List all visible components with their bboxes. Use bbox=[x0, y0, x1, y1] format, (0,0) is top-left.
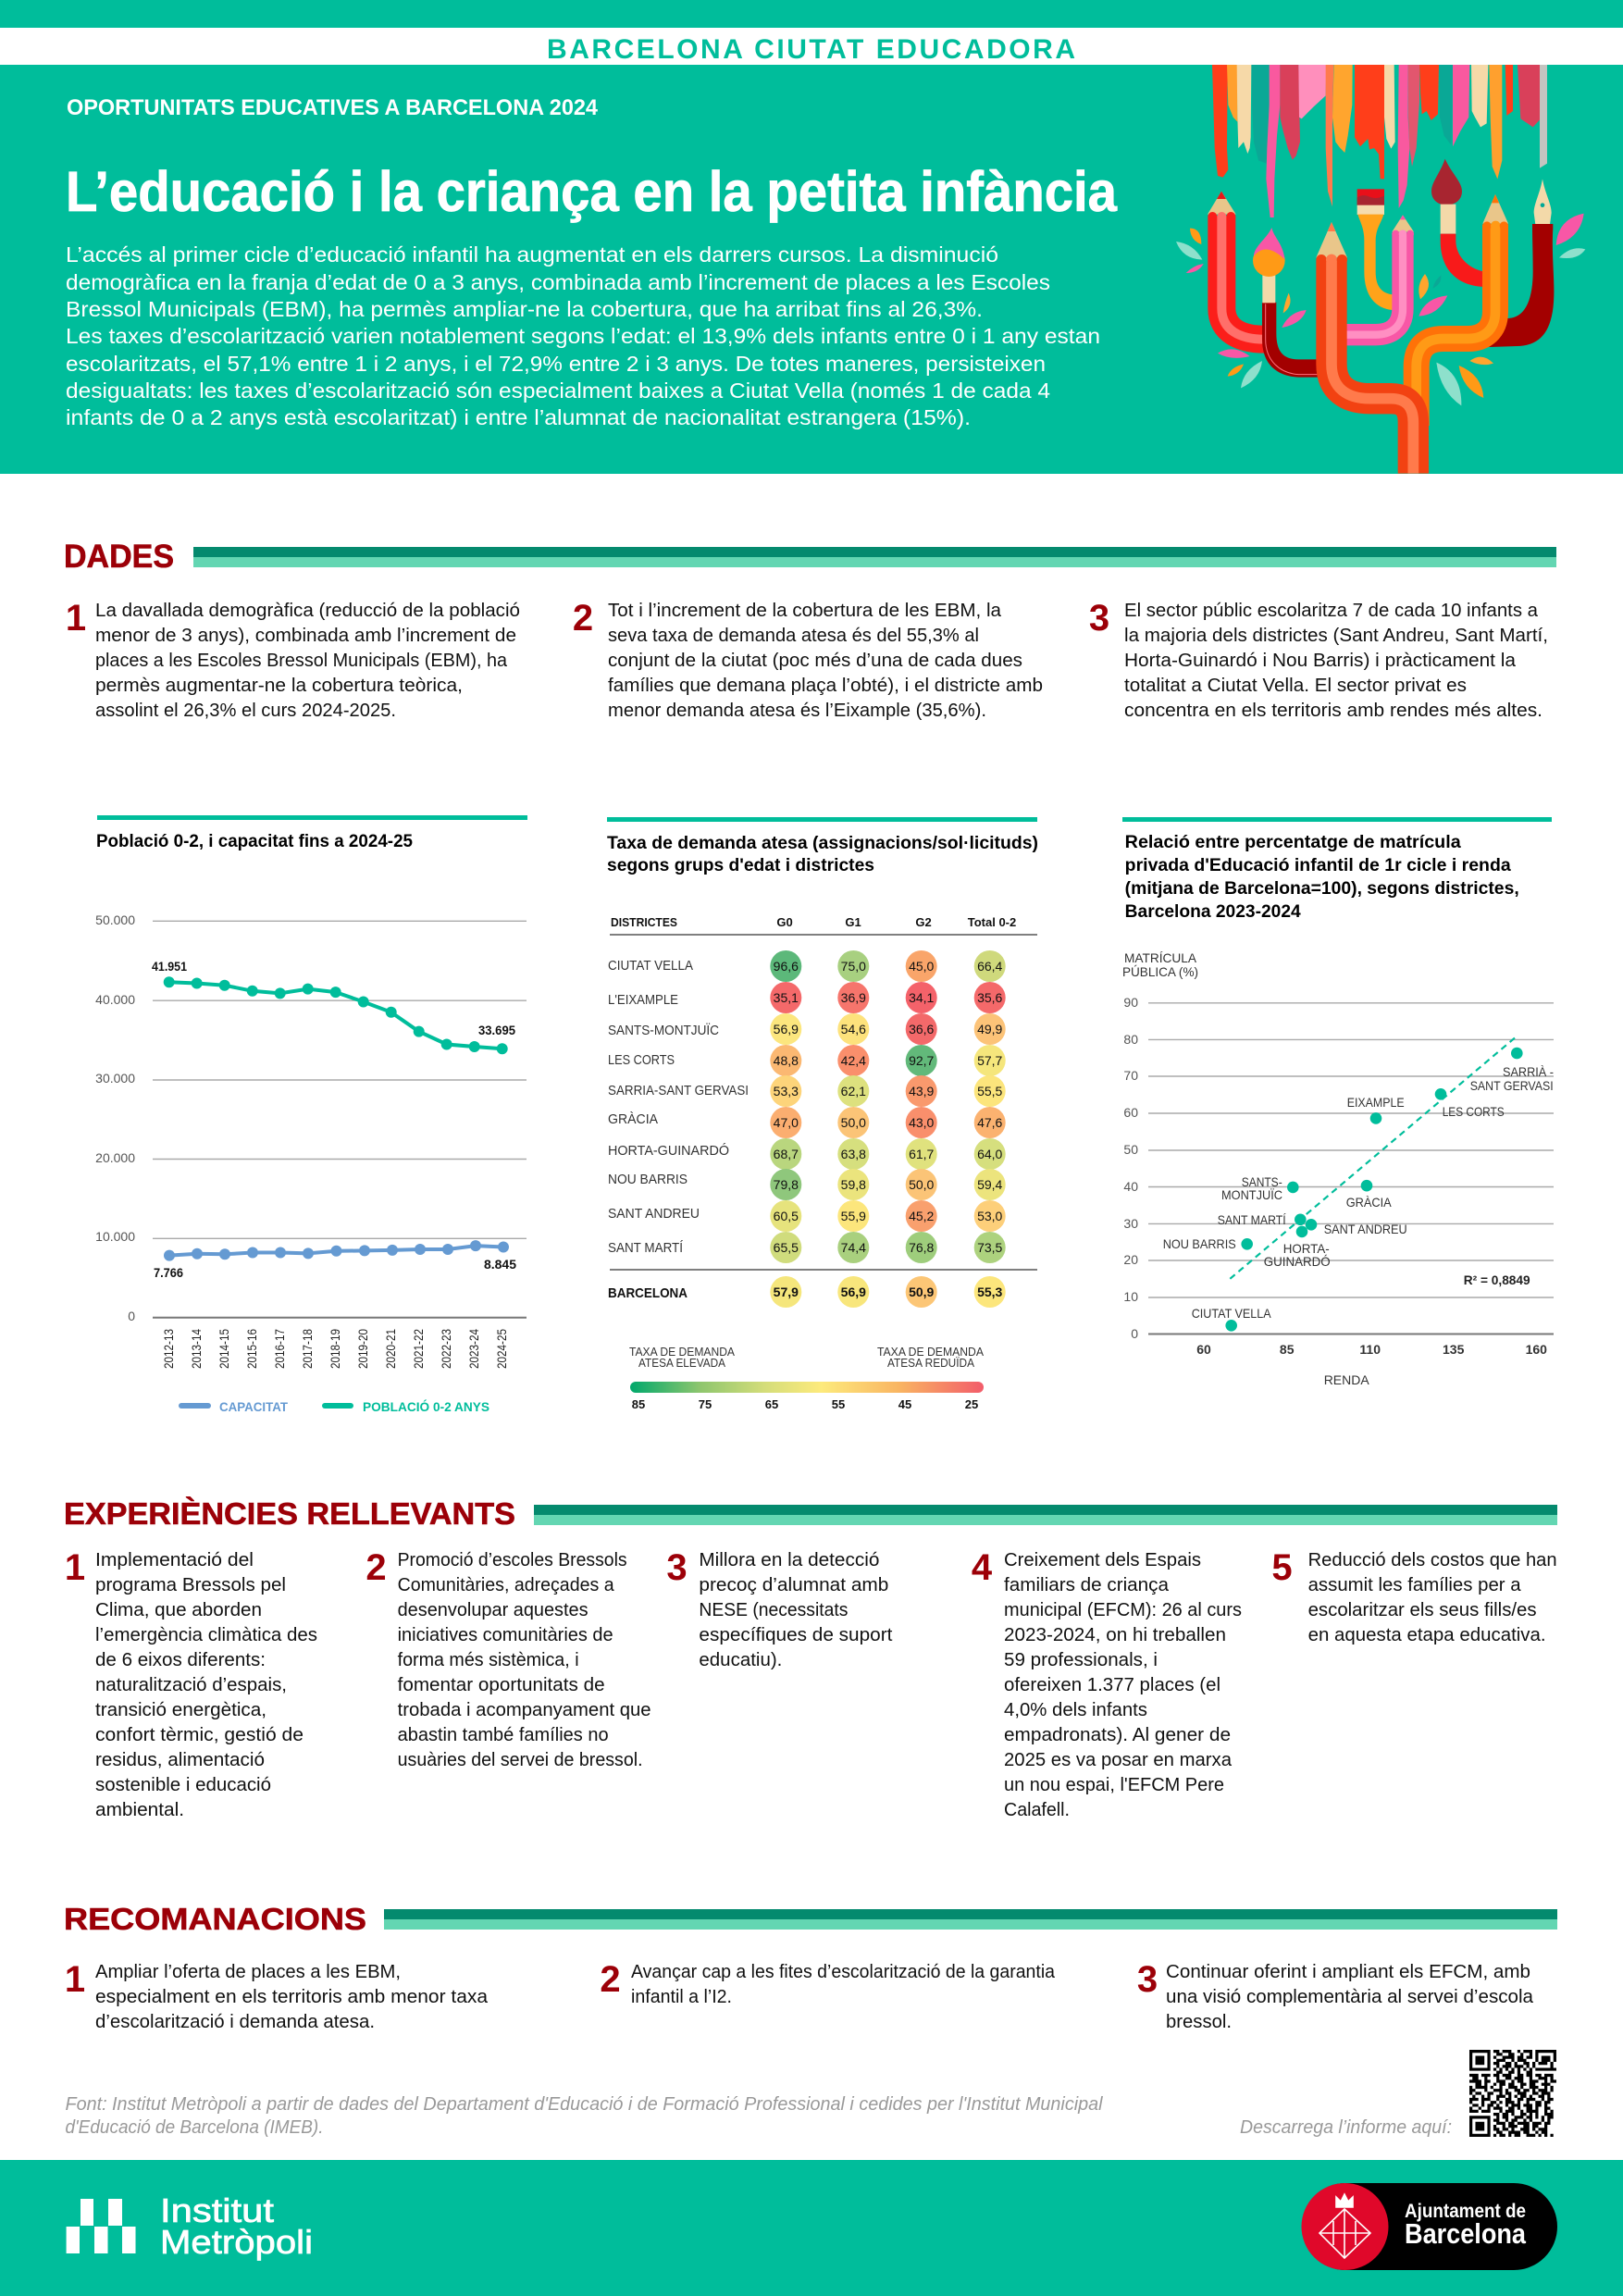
experience 1: programa Bressols pel bbox=[95, 1575, 286, 1595]
scatter labels: SANT MARTÍ bbox=[1218, 1212, 1286, 1227]
recommendation 3: una visió complementària al servei d’escola bbox=[1166, 1987, 1534, 2007]
main title: L’educació i la criança en la petita infància bbox=[66, 160, 1118, 223]
line chart: population and capacity: 40.000 bbox=[95, 992, 135, 1007]
intro text: Les taxes d’escolarització varien notablement segons l’edat: el 13,9% dels infants entre 0 i 1 any estan bbox=[66, 324, 1100, 348]
data point 2: menor demanda atesa és l’Eixample (35,6%). bbox=[608, 701, 986, 721]
data point 3: concentra en els territoris amb rendes més altes. bbox=[1124, 701, 1542, 721]
experience 1: 1 bbox=[65, 1547, 85, 1588]
colour scale legend: 65 bbox=[765, 1397, 778, 1411]
experience 5: 5 bbox=[1271, 1547, 1293, 1588]
section heading: RECOMANACIONS: RECOMANACIONS bbox=[64, 1902, 366, 1936]
header panel bbox=[0, 0, 1623, 475]
line chart: population and capacity: 33.695 bbox=[478, 1023, 515, 1037]
line chart: population and capacity: 10.000 bbox=[95, 1229, 135, 1244]
heat table: demand rate by district: G0 bbox=[776, 915, 793, 929]
recommendation 1: d’escolarització i demanda atesa. bbox=[95, 2012, 375, 2032]
table row: Nou Barris bbox=[608, 1169, 1006, 1200]
scatter chart: enrolment vs income: 0 bbox=[1131, 1326, 1138, 1341]
experience 3: 3 bbox=[666, 1547, 688, 1588]
scatter chart: enrolment vs income: privada d'Educació infantil de 1r cicle i renda bbox=[1125, 856, 1511, 875]
table row: Nou Barris: 59,8 bbox=[841, 1177, 866, 1192]
data point 3: 3 bbox=[1089, 598, 1109, 639]
colour scale legend: TAXA DE DEMANDA bbox=[877, 1345, 984, 1359]
footer band bbox=[0, 2160, 1623, 2296]
icon: pink pencil bbox=[1344, 215, 1414, 335]
table row: Sant Andreu: 60,5 bbox=[774, 1209, 799, 1223]
table row: Les Corts: 48,8 bbox=[774, 1053, 799, 1068]
section heading: EXPERIÈNCIES RELLEVANTS bbox=[64, 1496, 1557, 1531]
table row: Barcelona total: 57,9 bbox=[774, 1285, 799, 1299]
intro text: escolaritzats, el 57,1% entre 1 i 2 anys, i el 72,9% entre 2 i 3 anys. De totes maneres, persisteixen bbox=[66, 352, 1046, 376]
colour scale legend bbox=[629, 1345, 984, 1411]
table row: L'Eixample: 36,9 bbox=[841, 990, 866, 1005]
table row: Sants-Montjuïc: 54,6 bbox=[841, 1022, 866, 1036]
line chart: population and capacity: 0 bbox=[128, 1309, 135, 1323]
recommendation 2: Avançar cap a les fites d’escolarització de la garantia bbox=[631, 1962, 1056, 1982]
logo: Ajuntament de Barcelona bbox=[1301, 2183, 1557, 2270]
table row: L'Eixample: L'EIXAMPLE bbox=[608, 992, 678, 1008]
recommendation 2 bbox=[600, 1959, 1056, 2007]
table row: L'Eixample: 35,6 bbox=[977, 990, 1003, 1005]
recommendation 1: 1 bbox=[65, 1959, 85, 2000]
line chart: population and capacity: 2021-22 bbox=[411, 1329, 426, 1369]
icon: flat brush bbox=[1357, 189, 1393, 310]
header kicker: OPORTUNITATS EDUCATIVES A BARCELONA 2024 bbox=[67, 95, 599, 120]
table row: Ciutat Vella: 96,6 bbox=[774, 959, 799, 974]
data point 2: conjunt de la ciutat (poc més d’una de cada dues bbox=[608, 651, 1022, 671]
experience 5: escolaritzar els seus fills/es bbox=[1308, 1600, 1537, 1620]
table row: Sants-Montjuïc: 56,9 bbox=[774, 1022, 799, 1036]
data point 1: places a les Escoles Bressol Municipals (EBM), ha bbox=[95, 651, 508, 671]
scatter chart: enrolment vs income: MATRÍCULA bbox=[1124, 950, 1197, 965]
experience 3: educatiu). bbox=[699, 1650, 782, 1670]
table row: Gràcia bbox=[608, 1107, 1006, 1138]
table row: Horta-Guinardó: 61,7 bbox=[909, 1147, 935, 1161]
table row: Les Corts: 42,4 bbox=[841, 1053, 866, 1068]
line chart: population and capacity: 2024-25 bbox=[494, 1329, 509, 1369]
intro text: Bressol Municipals (EBM), ha permès ampliar-ne la cobertura, que ha arribat fins al 26,3%. bbox=[66, 297, 983, 321]
scatter chart: enrolment vs income: 85 bbox=[1280, 1342, 1295, 1357]
icon: central pencil bbox=[1316, 222, 1413, 475]
table row: Gràcia: 47,0 bbox=[774, 1115, 799, 1130]
table row: Sarria-Sant Gervasi: 62,1 bbox=[841, 1084, 866, 1098]
recommendation 2: infantil a l’I2. bbox=[631, 1987, 732, 2007]
scatter chart: enrolment vs income: 10 bbox=[1123, 1289, 1138, 1304]
line chart: population and capacity: 2019-20 bbox=[355, 1329, 370, 1369]
data point 3: totalitat a Ciutat Vella. El sector privat es bbox=[1124, 676, 1467, 696]
top banner title: BARCELONA CIUTAT EDUCADORA bbox=[547, 34, 1075, 65]
table row: Sants-Montjuïc: SANTS-MONTJUÏC bbox=[608, 1023, 719, 1038]
icon: paint strokes bbox=[1212, 65, 1547, 217]
chart legend bbox=[179, 1398, 489, 1414]
table row: Ciutat Vella: CIUTAT VELLA bbox=[608, 958, 693, 974]
scatter chart: enrolment vs income: 60 bbox=[1123, 1105, 1138, 1120]
table row: Les Corts: 92,7 bbox=[909, 1053, 935, 1068]
experience 2: fomentar oportunitats de bbox=[398, 1675, 605, 1695]
source note: d'Educació de Barcelona (IMEB). bbox=[65, 2117, 324, 2138]
line chart: population and capacity: Població 0-2, i capacitat fins a 2024-25 bbox=[96, 832, 413, 851]
table row: Sant Andreu bbox=[608, 1200, 1006, 1232]
scatter chart: enrolment vs income: Relació entre percentatge de matrícula bbox=[1125, 833, 1461, 852]
scatter chart: enrolment vs income: 20 bbox=[1123, 1252, 1138, 1267]
experience 1 bbox=[65, 1547, 317, 1820]
data point 3: la majoria dels districtes (Sant Andreu, Sant Martí, bbox=[1124, 626, 1548, 646]
table row: Sant Andreu: 45,2 bbox=[909, 1209, 935, 1223]
table row: Ciutat Vella: 66,4 bbox=[977, 959, 1003, 974]
experience 4: un nou espai, l'EFCM Pere bbox=[1004, 1775, 1224, 1795]
experience 1: Implementació del bbox=[95, 1550, 254, 1570]
data point 1: menor de 3 anys), combinada amb l’increment de bbox=[95, 626, 516, 646]
line chart: population and capacity: 2022-23 bbox=[439, 1329, 453, 1369]
scatter chart: enrolment vs income: 80 bbox=[1123, 1032, 1138, 1047]
source note: Font: Institut Metròpoli a partir de dades del Departament d'Educació i de Formació Professional i cedides per l'Institut Municipal bbox=[65, 2094, 1103, 2115]
table row: Sant Martí: 73,5 bbox=[977, 1240, 1003, 1255]
experience 2: usuàries del servei de bressol. bbox=[398, 1750, 643, 1770]
capacity series bbox=[164, 1240, 509, 1261]
table row: Sants-Montjuïc: 49,9 bbox=[977, 1022, 1003, 1036]
table row: Barcelona total: BARCELONA bbox=[608, 1285, 688, 1301]
experience 2: Promoció d’escoles Bressols bbox=[398, 1550, 627, 1570]
scatter labels: MONTJUÏC bbox=[1221, 1187, 1282, 1202]
recommendation 1: especialment en els territoris amb menor taxa bbox=[95, 1987, 489, 2007]
experience 5: Reducció dels costos que han bbox=[1308, 1550, 1557, 1570]
scatter labels: GRÀCIA bbox=[1346, 1195, 1392, 1210]
experience 2: desenvolupar aquestes bbox=[398, 1600, 588, 1620]
icon: orange pencil bbox=[1417, 194, 1508, 426]
heat table: demand rate by district: Taxa de demanda atesa (assignacions/sol·licituds) bbox=[607, 834, 1038, 853]
line chart: population and capacity: 2013-14 bbox=[189, 1329, 204, 1369]
experience 1: naturalització d’espais, bbox=[95, 1675, 287, 1695]
experience 4: empadronats). Al gener de bbox=[1004, 1725, 1231, 1745]
recommendation 3: Continuar oferint i ampliant els EFCM, amb bbox=[1166, 1962, 1530, 1982]
scatter chart: enrolment vs income: 40 bbox=[1123, 1179, 1138, 1194]
data point 1: permès augmentar-ne la cobertura teòrica, bbox=[95, 676, 463, 696]
scatter labels: SANT ANDREU bbox=[1324, 1222, 1407, 1236]
scatter chart: enrolment vs income bbox=[1122, 817, 1554, 1387]
experience 4: 4 bbox=[972, 1547, 993, 1588]
experience 3: precoç d’alumnat amb bbox=[699, 1575, 888, 1595]
colour scale legend: ATESA ELEVADA bbox=[638, 1356, 725, 1370]
table row: Barcelona total: 55,3 bbox=[977, 1285, 1003, 1299]
recommendation 1 bbox=[65, 1959, 489, 2032]
colour scale legend: 25 bbox=[965, 1397, 978, 1411]
line chart: population and capacity: 2018-19 bbox=[328, 1329, 342, 1369]
line chart: population and capacity: 2015-16 bbox=[244, 1329, 259, 1369]
scatter chart: enrolment vs income: 160 bbox=[1526, 1342, 1547, 1357]
table row: Barcelona total bbox=[608, 1276, 1006, 1308]
table row: Ciutat Vella bbox=[608, 950, 1006, 982]
scatter labels: EIXAMPLE bbox=[1347, 1095, 1405, 1110]
line chart: population and capacity: 2017-18 bbox=[300, 1329, 315, 1369]
recommendation 2: 2 bbox=[600, 1959, 621, 2000]
scatter chart: enrolment vs income: 50 bbox=[1123, 1142, 1138, 1157]
intro text: infants de 0 a 2 anys està escolaritzat) i entre l’alumnat de nacionalitat estrangera (15%). bbox=[66, 405, 971, 429]
table row: Gràcia: 43,0 bbox=[909, 1115, 935, 1130]
scatter labels: HORTA- bbox=[1283, 1241, 1330, 1256]
table row: Les Corts bbox=[608, 1045, 1006, 1076]
experience 5: assumit les famílies per a bbox=[1308, 1575, 1521, 1595]
experience 1: Clima, que aborden bbox=[95, 1600, 262, 1620]
experience 3: Millora en la detecció bbox=[699, 1550, 879, 1570]
logo: Institut Metròpoli bbox=[67, 2191, 313, 2261]
data point 2: famílies que demana plaça l’obté), i el districte amb bbox=[608, 676, 1043, 696]
table row: Gràcia: 47,6 bbox=[977, 1115, 1003, 1130]
table row: Horta-Guinardó: 68,7 bbox=[774, 1147, 799, 1161]
intro text: demogràfica en la franja d’edat de 0 a 3 anys, combinada amb l’increment de places a les Escoles bbox=[66, 270, 1050, 294]
scatter chart: enrolment vs income: 135 bbox=[1443, 1342, 1465, 1357]
experience 4: 2023-2024, on hi treballen bbox=[1004, 1625, 1226, 1645]
scatter chart: enrolment vs income: 90 bbox=[1123, 995, 1138, 1010]
scatter chart: enrolment vs income: R² = 0,8849 bbox=[1464, 1272, 1530, 1287]
scatter chart: enrolment vs income: 70 bbox=[1123, 1068, 1138, 1083]
scatter chart: enrolment vs income: 30 bbox=[1123, 1216, 1138, 1231]
data point 2: 2 bbox=[573, 598, 593, 639]
scatter chart: enrolment vs income: 110 bbox=[1359, 1342, 1381, 1357]
table row: Sarria-Sant Gervasi bbox=[608, 1075, 1006, 1107]
scatter chart: enrolment vs income: (mitjana de Barcelona=100), segons districtes, bbox=[1125, 879, 1519, 899]
scatter labels bbox=[1163, 1064, 1554, 1321]
trend line bbox=[1230, 1036, 1517, 1279]
experience 4: Creixement dels Espais bbox=[1004, 1550, 1201, 1570]
source note bbox=[65, 2094, 1103, 2138]
experience 2: trobada i acompanyament que bbox=[398, 1700, 651, 1720]
experience 4: 59 professionals, i bbox=[1004, 1650, 1158, 1670]
table row: Sant Martí: 65,5 bbox=[774, 1240, 799, 1255]
experience 4: Calafell. bbox=[1004, 1800, 1070, 1820]
table row: Sarria-Sant Gervasi: 55,5 bbox=[977, 1084, 1003, 1098]
heat table: demand rate by district: G1 bbox=[845, 915, 861, 929]
icon: leaves bbox=[1176, 214, 1585, 405]
line chart: population and capacity: 2012-13 bbox=[161, 1329, 176, 1369]
heat table: demand rate by district: Total 0-2 bbox=[968, 915, 1016, 929]
experience 3: específiques de suport bbox=[699, 1625, 893, 1645]
intro text: desigualtats: les taxes d’escolarització són especialment baixes a Ciutat Vella (només 1 de cada 4 bbox=[66, 379, 1050, 403]
line chart: population and capacity: 50.000 bbox=[95, 912, 135, 927]
data point 2 bbox=[573, 598, 1043, 721]
experience 4: 4,0% dels infants bbox=[1004, 1700, 1147, 1720]
scatter labels: NOU BARRIS bbox=[1163, 1236, 1236, 1251]
colour scale legend: 55 bbox=[832, 1397, 845, 1411]
logo: Ajuntament de Barcelona: Barcelona bbox=[1405, 2217, 1527, 2250]
data point 3: El sector públic escolaritza 7 de cada 10 infants a bbox=[1124, 601, 1539, 621]
table row: Barcelona total: 50,9 bbox=[909, 1285, 935, 1299]
data point 3 bbox=[1089, 598, 1548, 721]
section heading: RECOMANACIONS bbox=[64, 1902, 1557, 1936]
table row: Sarria-Sant Gervasi: 53,3 bbox=[774, 1084, 799, 1098]
table row: Horta-Guinardó bbox=[608, 1138, 1006, 1170]
experience 1: residus, alimentació bbox=[95, 1750, 265, 1770]
scatter labels: SANTS- bbox=[1242, 1174, 1282, 1189]
icon: pen bbox=[1489, 179, 1554, 347]
experience 2: iniciatives comunitàries de bbox=[398, 1625, 613, 1645]
table row: Les Corts: LES CORTS bbox=[608, 1052, 675, 1068]
data point 1: La davallada demogràfica (reducció de la població bbox=[95, 601, 520, 621]
table row: Sants-Montjuïc: 36,6 bbox=[909, 1022, 935, 1036]
data point 1 bbox=[66, 598, 520, 721]
logo: Institut Metròpoli: Institut bbox=[160, 2191, 274, 2229]
icon: round brush bbox=[1431, 159, 1483, 287]
line chart: population and capacity: 2016-17 bbox=[272, 1329, 287, 1369]
table row: Horta-Guinardó: HORTA-GUINARDÓ bbox=[608, 1143, 729, 1159]
scatter labels: GUINARDÓ bbox=[1264, 1254, 1331, 1269]
line chart: population and capacity: 2023-24 bbox=[466, 1329, 481, 1369]
experience 1: ambiental. bbox=[95, 1800, 184, 1820]
experience 4: 2025 es va posar en marxa bbox=[1004, 1750, 1233, 1770]
colour scale legend: 85 bbox=[632, 1397, 645, 1411]
table row: Sant Martí: 76,8 bbox=[909, 1240, 935, 1255]
recommendation 1: Ampliar l’oferta de places a les EBM, bbox=[95, 1962, 401, 1982]
table row: Ciutat Vella: 45,0 bbox=[909, 959, 935, 974]
table row: Nou Barris: 79,8 bbox=[774, 1177, 799, 1192]
table row: Gràcia: GRÀCIA bbox=[608, 1111, 658, 1127]
line chart: population and capacity: 2020-21 bbox=[383, 1329, 398, 1369]
logo: Ajuntament de Barcelona: Ajuntament de bbox=[1405, 2201, 1526, 2222]
table row: Nou Barris: NOU BARRIS bbox=[608, 1172, 688, 1187]
line chart: population and capacity: 41.951 bbox=[152, 959, 187, 974]
table row: Sant Martí: 74,4 bbox=[841, 1240, 866, 1255]
table row: Les Corts: 57,7 bbox=[977, 1053, 1003, 1068]
scatter chart: enrolment vs income: Barcelona 2023-2024 bbox=[1125, 902, 1301, 922]
scatter labels: SANT GERVASI bbox=[1470, 1078, 1554, 1093]
colour scale legend: 45 bbox=[898, 1397, 911, 1411]
icon: red pencil bbox=[1208, 192, 1265, 340]
recommendation 3 bbox=[1137, 1959, 1534, 2032]
table row: Nou Barris: 59,4 bbox=[977, 1177, 1003, 1192]
experience 1: transició energètica, bbox=[95, 1700, 266, 1720]
table row: Sarria-Sant Gervasi: 43,9 bbox=[909, 1084, 935, 1098]
experience 2: forma més sistèmica, i bbox=[398, 1650, 579, 1670]
intro text: L’accés al primer cicle d’educació infantil ha augmentat en els darrers cursos. La disminució bbox=[66, 242, 998, 267]
colour scale legend: 75 bbox=[699, 1397, 712, 1411]
experience 2: abastin també famílies no bbox=[398, 1725, 609, 1745]
colour scale legend: ATESA REDUÏDA bbox=[887, 1356, 974, 1370]
scatter chart: enrolment vs income: PÚBLICA (%) bbox=[1122, 964, 1198, 979]
line chart: population and capacity: 7.766 bbox=[154, 1265, 183, 1280]
table row: Sant Martí bbox=[608, 1232, 1006, 1263]
experience 4 bbox=[972, 1547, 1242, 1820]
recommendation 3: bressol. bbox=[1166, 2012, 1232, 2032]
table row: Horta-Guinardó: 64,0 bbox=[977, 1147, 1003, 1161]
table row: Horta-Guinardó: 63,8 bbox=[841, 1147, 866, 1161]
data point 3: Horta-Guinardó i Nou Barris) i pràcticament la bbox=[1124, 651, 1517, 671]
line chart: population and capacity: 30.000 bbox=[95, 1071, 135, 1086]
table row: Sant Andreu: 55,9 bbox=[841, 1209, 866, 1223]
data point 2: seva taxa de demanda atesa és del 55,3% al bbox=[608, 626, 979, 646]
population series bbox=[164, 976, 508, 1054]
experience 1: confort tèrmic, gestió de bbox=[95, 1725, 304, 1745]
experience 4: familiars de criança bbox=[1004, 1575, 1170, 1595]
line chart: population and capacity bbox=[95, 815, 527, 1414]
experience 2: 2 bbox=[365, 1547, 387, 1588]
table row: L'Eixample: 34,1 bbox=[909, 990, 935, 1005]
heat table: demand rate by district: segons grups d'edat i districtes bbox=[607, 856, 874, 875]
recommendation 3: 3 bbox=[1137, 1959, 1158, 2000]
line chart: population and capacity: 8.845 bbox=[484, 1257, 516, 1272]
line chart: population and capacity: 20.000 bbox=[95, 1150, 135, 1165]
experience 3: NESE (necessitats bbox=[699, 1600, 848, 1620]
chart legend: POBLACIÓ 0-2 ANYS bbox=[363, 1398, 489, 1414]
QR code bbox=[1469, 2052, 1556, 2135]
scatter chart: enrolment vs income: 60 bbox=[1196, 1342, 1211, 1357]
table row: Ciutat Vella: 75,0 bbox=[841, 959, 866, 974]
section heading: EXPERIÈNCIES RELLEVANTS: EXPERIÈNCIES RELLEVANTS bbox=[64, 1496, 515, 1531]
line chart: population and capacity: 2014-15 bbox=[217, 1329, 231, 1369]
chart legend: CAPACITAT bbox=[219, 1399, 288, 1414]
experience 1: l’emergència climàtica des bbox=[95, 1625, 317, 1645]
experience 1: sostenible i educació bbox=[95, 1775, 271, 1795]
data point 2: Tot i l’increment de la cobertura de les EBM, la bbox=[608, 601, 1002, 621]
table row: L'Eixample: 35,1 bbox=[774, 990, 799, 1005]
table row: Gràcia: 50,0 bbox=[841, 1115, 866, 1130]
scatter labels: LES CORTS bbox=[1443, 1104, 1505, 1119]
heat table: demand rate by district: DISTRICTES bbox=[611, 915, 677, 929]
heat table: demand rate by district bbox=[607, 817, 1038, 1411]
download note: Descarrega l’informe aquí: bbox=[1240, 2117, 1452, 2138]
table row: Nou Barris: 50,0 bbox=[909, 1177, 935, 1192]
data point 1: 1 bbox=[66, 598, 86, 639]
table row: Sant Martí: SANT MARTÍ bbox=[608, 1240, 684, 1256]
section heading: DADES: DADES bbox=[64, 539, 174, 575]
heat table: demand rate by district: G2 bbox=[915, 915, 932, 929]
icon: orange ball brush bbox=[1253, 228, 1318, 378]
experience 3 bbox=[666, 1547, 893, 1670]
experience 4: municipal (EFCM): 26 al curs bbox=[1004, 1600, 1242, 1620]
colour scale legend: TAXA DE DEMANDA bbox=[629, 1345, 735, 1359]
table row: Sarria-Sant Gervasi: SARRIA-SANT GERVASI bbox=[608, 1083, 749, 1098]
table row: Sants-Montjuïc bbox=[608, 1013, 1006, 1045]
experience 1: de 6 eixos diferents: bbox=[95, 1650, 266, 1670]
scatter points bbox=[1225, 1048, 1523, 1332]
data point 1: assolint el 26,3% el curs 2024-2025. bbox=[95, 701, 396, 721]
table row: Barcelona total: 56,9 bbox=[841, 1285, 866, 1299]
scatter labels: SARRIÀ - bbox=[1503, 1064, 1554, 1079]
logo: Institut Metròpoli: Metròpoli bbox=[160, 2223, 313, 2261]
experience 5 bbox=[1271, 1547, 1557, 1645]
experience 2 bbox=[365, 1547, 651, 1770]
intro text bbox=[66, 242, 1100, 429]
table row: Sant Andreu: SANT ANDREU bbox=[608, 1206, 700, 1222]
experience 5: en aquesta etapa educativa. bbox=[1308, 1625, 1546, 1645]
section heading: DADES bbox=[64, 539, 1556, 575]
experience 4: ofereixen 1.377 places (el bbox=[1004, 1675, 1220, 1695]
experience 2: Comunitàries, adreçades a bbox=[398, 1575, 614, 1595]
scatter labels: CIUTAT VELLA bbox=[1192, 1306, 1271, 1321]
illustration: pencils and brushes tree bbox=[1176, 65, 1585, 475]
table row: L'Eixample bbox=[608, 982, 1006, 1013]
scatter chart: enrolment vs income: RENDA bbox=[1324, 1372, 1369, 1387]
table row: Sant Andreu: 53,0 bbox=[977, 1209, 1003, 1223]
